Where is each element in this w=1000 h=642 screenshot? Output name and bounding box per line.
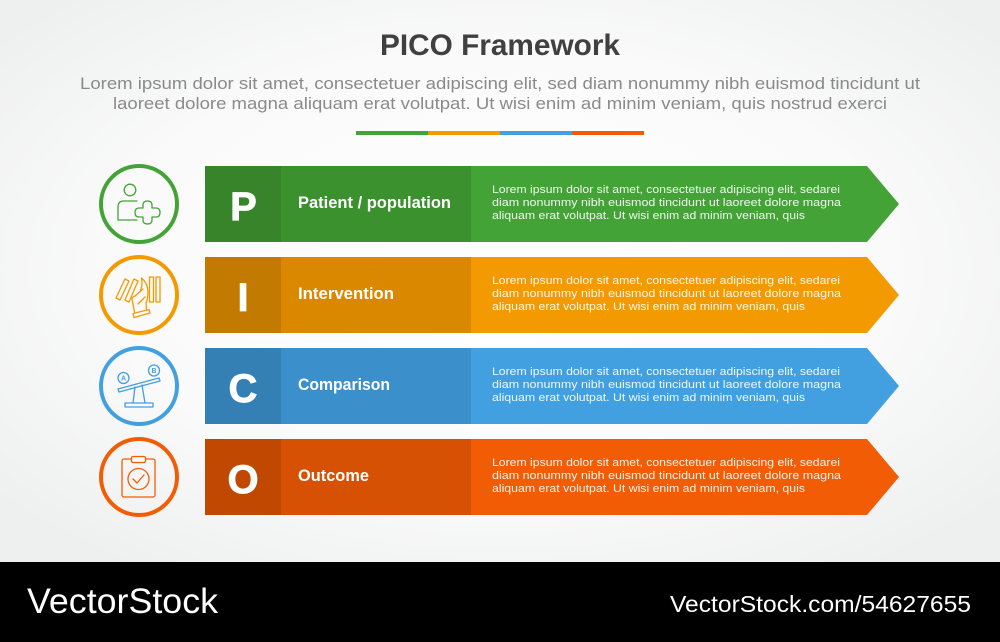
row: patient / population	[101, 166, 899, 242]
arrow bar	[205, 348, 899, 424]
subtitle text: Lorem ipsum dolor sit amet, consectetuer adipiscing elit, sed diam nonummy nibh euismod tincidunt ut	[80, 74, 920, 93]
letter: P	[230, 185, 257, 229]
arrow bar	[205, 439, 899, 515]
subtitle text	[80, 74, 920, 113]
icon: hand stopping dominoes	[101, 257, 177, 333]
row: comparison	[101, 348, 899, 424]
colour divider	[356, 131, 644, 135]
row: outcome	[101, 439, 899, 515]
description: diam nonummy nibh euismod tincidunt ut laoreet dolore magna	[492, 470, 842, 482]
description	[492, 366, 842, 404]
description: diam nonummy nibh euismod tincidunt ut laoreet dolore magna	[492, 197, 842, 209]
description: Lorem ipsum dolor sit amet, consectetuer adipiscing elit, sedarei	[492, 275, 840, 287]
description	[492, 457, 842, 495]
letter: O	[227, 458, 259, 502]
heading: Comparison	[298, 375, 390, 394]
letter: I	[237, 276, 249, 320]
footer band	[0, 562, 1000, 642]
letter: C	[229, 367, 257, 411]
brand wordmark: VectorStock	[27, 582, 219, 621]
arrow bar	[205, 166, 899, 242]
icon: seesaw balancing A and B	[101, 348, 177, 424]
description: aliquam erat volutpat. Ut wisi enim ad minim veniam, quis	[492, 210, 806, 222]
title: PICO Framework	[380, 29, 620, 62]
icon: clipboard with check	[101, 439, 177, 515]
row: intervention	[101, 257, 899, 333]
description: aliquam erat volutpat. Ut wisi enim ad minim veniam, quis	[492, 483, 806, 495]
description: Lorem ipsum dolor sit amet, consectetuer adipiscing elit, sedarei	[492, 457, 840, 469]
heading: Outcome	[298, 466, 369, 485]
heading: Intervention	[298, 284, 394, 303]
icon: seesaw balancing A and B: B	[151, 368, 157, 375]
heading: Patient / population	[298, 193, 451, 212]
description: aliquam erat volutpat. Ut wisi enim ad minim veniam, quis	[492, 392, 806, 404]
description: aliquam erat volutpat. Ut wisi enim ad minim veniam, quis	[492, 301, 806, 313]
icon: patient with plus	[101, 166, 177, 242]
description	[492, 184, 842, 222]
icon: seesaw balancing A and B: A	[121, 376, 126, 382]
subtitle text: laoreet dolore magna aliquam erat volutpat. Ut wisi enim ad minim veniam, quis nostrud exerci	[113, 94, 887, 113]
description: Lorem ipsum dolor sit amet, consectetuer adipiscing elit, sedarei	[492, 184, 840, 196]
description: diam nonummy nibh euismod tincidunt ut laoreet dolore magna	[492, 288, 842, 300]
description: Lorem ipsum dolor sit amet, consectetuer adipiscing elit, sedarei	[492, 366, 840, 378]
arrow bar	[205, 257, 899, 333]
description: diam nonummy nibh euismod tincidunt ut laoreet dolore magna	[492, 379, 842, 391]
image id: VectorStock.com/54627655	[670, 591, 971, 617]
description	[492, 275, 842, 313]
